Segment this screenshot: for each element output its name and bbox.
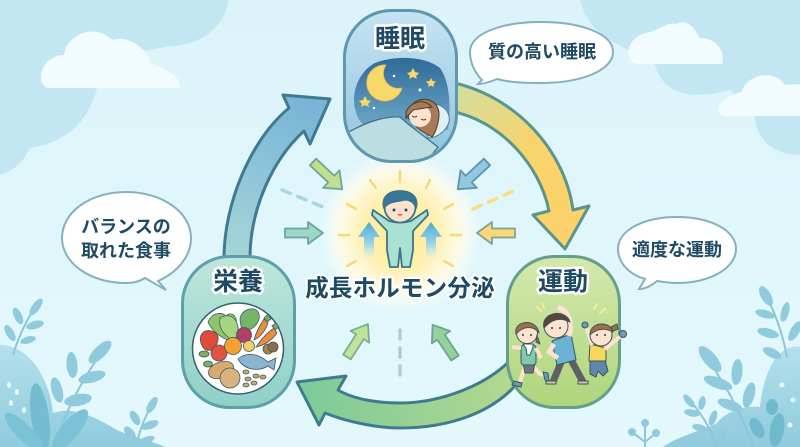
small arrow: bottom left	[338, 318, 377, 363]
icon: rising arrow right	[420, 222, 442, 259]
text: balanced meals: 取れた食事	[81, 241, 171, 261]
arrow: exercise to nutrition (green)	[297, 355, 520, 428]
icon: sleeping girl	[406, 99, 439, 137]
icon: blanket	[349, 116, 439, 160]
icon: adult stretching	[544, 307, 588, 384]
child figure	[372, 191, 428, 267]
cloud: top right dark	[580, 0, 800, 155]
text: balanced meals	[81, 217, 171, 261]
icon: running child	[512, 322, 549, 387]
icon: motion sparkles	[537, 303, 605, 313]
small arrow: top left	[305, 153, 350, 198]
small arrow: top right	[450, 153, 495, 198]
small arrow: left	[285, 222, 323, 244]
heading: exercise: 運動	[538, 268, 588, 296]
text: balanced meals: バランスの	[81, 217, 171, 237]
icon: child body	[372, 210, 428, 267]
bubble: nutrition	[62, 192, 191, 290]
cloud: top left dark	[0, 0, 228, 175]
panel: nutrition	[182, 256, 294, 408]
icon: food plate	[192, 303, 284, 394]
center glow	[318, 150, 482, 314]
heading: nutrition: 栄養	[213, 268, 263, 296]
icon: exercising family	[512, 307, 626, 387]
icon: faces	[522, 327, 606, 336]
cloud: top right white lower	[718, 75, 800, 116]
text: moderate exercise: 適度な運動	[632, 240, 722, 260]
dashed rays	[282, 189, 518, 380]
icon: stars	[359, 68, 436, 109]
icon: pillow	[420, 103, 449, 138]
text: high quality sleep: 質の高い睡眠	[488, 42, 596, 62]
panel: exercise	[508, 256, 626, 408]
small arrow: right	[477, 222, 515, 244]
plants: bottom right	[628, 284, 800, 447]
arrow: nutrition to sleep (blue)	[224, 95, 330, 258]
icon: crescent moon	[367, 65, 402, 101]
icon: child face	[392, 208, 408, 216]
icon: jumping child	[582, 322, 626, 377]
icon: rising arrow left	[358, 222, 380, 259]
heading: sleep: 睡眠	[375, 25, 425, 53]
icon: child hair	[383, 191, 417, 208]
icon: night sky	[354, 58, 450, 130]
bubble: sleep	[470, 22, 613, 84]
cloud: top right white upper	[628, 22, 723, 64]
arrow: sleep to exercise (yellow)	[450, 82, 589, 249]
glow rays	[339, 171, 461, 266]
bubble: exercise	[618, 217, 736, 289]
cloud: top left white	[41, 31, 180, 88]
panel: sleep	[340, 10, 456, 170]
radiating small arrows	[285, 153, 515, 364]
small arrow: bottom right	[424, 319, 464, 364]
plants: bottom left	[0, 297, 165, 447]
title: 成長ホルモン分泌	[305, 275, 495, 301]
icon: child head	[384, 192, 416, 222]
